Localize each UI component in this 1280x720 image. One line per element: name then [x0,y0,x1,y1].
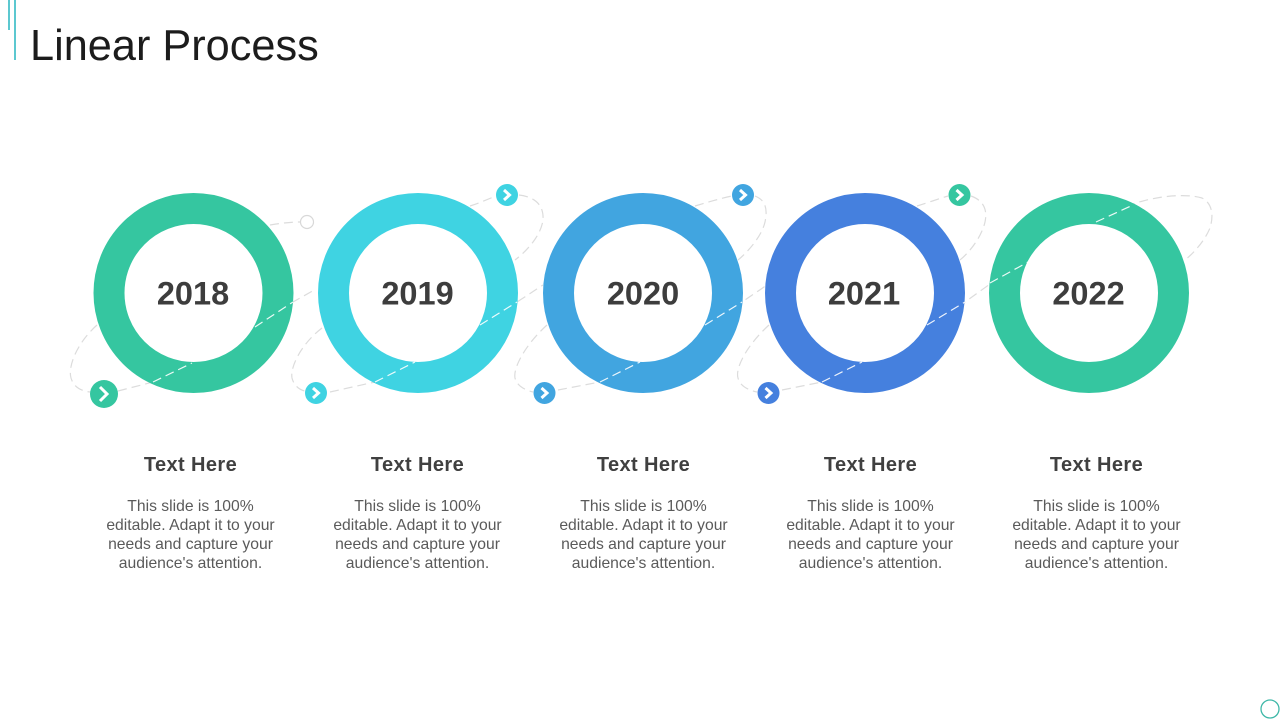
text block 1 [106,454,275,572]
ring 2021 [780,208,950,378]
text block 3: needs and capture your [561,536,726,553]
text block 4: needs and capture your [788,536,953,553]
title accent lines [9,0,15,60]
text block 1: audience's attention. [119,555,262,572]
text block 5: Text Here [1050,454,1143,476]
text block 3: Text Here [597,454,690,476]
year 2018: 2018 [157,276,229,312]
dashed orbits [70,195,1212,392]
text block 3: audience's attention. [572,555,715,572]
text block 2: needs and capture your [335,536,500,553]
ring 2020 [558,208,728,378]
text block 5: needs and capture your [1014,536,1179,553]
corner circle [1261,700,1279,718]
text block 3: editable. Adapt it to your [559,517,728,534]
ring 2022 [1004,208,1174,378]
small hollow node [300,216,314,228]
text block 2: editable. Adapt it to your [333,517,502,534]
text block 1: Text Here [144,454,237,476]
icon: arrow marker 2020 top [732,184,754,206]
icon: arrow marker 2019 bottom [305,382,327,404]
ring 2018 [109,208,278,378]
text block 4: This slide is 100% [807,498,934,515]
text block 1: This slide is 100% [127,498,254,515]
text block 5 [1012,454,1181,572]
icon: arrow marker 2021 bottom [758,382,780,404]
text block 5: audience's attention. [1025,555,1168,572]
text block 2 [333,454,502,572]
text block 2: Text Here [371,454,464,476]
year 2019: 2019 [381,276,454,312]
year 2021: 2021 [828,276,900,312]
icon: arrow marker 2019 top [496,184,518,206]
title: Linear Process [30,22,319,70]
orbit dashes over rings [153,205,1133,382]
text block 4: Text Here [824,454,917,476]
text block 4 [786,454,955,572]
text block 1: editable. Adapt it to your [106,517,275,534]
icon: arrow marker 2018 [90,380,118,408]
icon: arrow marker 2020 bottom [534,382,556,404]
text block 1: needs and capture your [108,536,273,553]
icon: arrow marker 2021 top [948,184,970,206]
ring 2019 [334,208,502,378]
text block 5: editable. Adapt it to your [1012,517,1181,534]
text block 5: This slide is 100% [1033,498,1160,515]
year 2020: 2020 [607,276,679,312]
text block 4: audience's attention. [799,555,942,572]
text block 3: This slide is 100% [580,498,707,515]
text block 3 [559,454,728,572]
text block 2: audience's attention. [346,555,489,572]
year 2022: 2022 [1052,276,1125,312]
text block 4: editable. Adapt it to your [786,517,955,534]
text block 2: This slide is 100% [354,498,481,515]
